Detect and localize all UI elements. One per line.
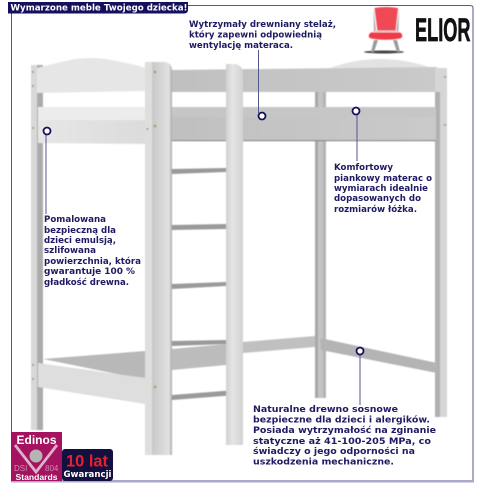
text: wood: Posiada wytrzymałość na zginanie bbox=[253, 425, 436, 435]
badge: 10 year warranty bbox=[62, 449, 113, 481]
text: paint bbox=[44, 214, 141, 287]
lower rear rails bbox=[172, 336, 437, 373]
ladder post bbox=[226, 64, 243, 445]
icon: red chair logo bbox=[364, 7, 404, 54]
text: mattress: piankowy materac o bbox=[334, 173, 432, 183]
bottom frame band bbox=[11, 480, 474, 482]
text: wood: statyczne aż 41-100-205 MPa, co bbox=[253, 436, 431, 446]
text: paint: dzieci emulsją, bbox=[44, 235, 116, 245]
badge: 10 year warranty: Gwarancji bbox=[64, 470, 112, 480]
callout marker: wood bbox=[356, 348, 364, 405]
lower front rail bbox=[38, 363, 145, 404]
back headboard arc bbox=[330, 59, 432, 68]
badge: Edinos standards: DSI bbox=[14, 464, 27, 473]
rear right post bbox=[435, 68, 447, 417]
text: wood: uszkodzenia mechaniczne. bbox=[253, 456, 394, 466]
badge: Edinos standards bbox=[11, 432, 62, 482]
text: paint: szlifowana bbox=[44, 245, 96, 255]
text: frame bbox=[189, 19, 336, 50]
badge: Edinos standards: Edinos bbox=[16, 435, 56, 447]
text: frame: wentylację materaca. bbox=[189, 40, 293, 50]
lower mattress edge bbox=[43, 351, 145, 378]
text: paint: powierzchnia, która bbox=[44, 256, 141, 266]
text: paint: gładkość drewna. bbox=[44, 277, 129, 287]
text: frame: Wytrzymały drewniany stelaż, bbox=[189, 19, 336, 29]
loft bed illustration bbox=[31, 58, 447, 455]
callout marker: paint bbox=[44, 128, 50, 214]
badge: Edinos standards: 804 bbox=[45, 464, 59, 473]
back top rail bbox=[172, 67, 437, 92]
text: mattress: dopasowanych do bbox=[334, 193, 421, 203]
header banner: Wymarzone meble Twojego dziecka! bbox=[10, 3, 188, 13]
text: paint: Pomalowana bbox=[44, 214, 106, 224]
main corner post bbox=[145, 62, 172, 455]
text: wood: bezpieczne dla dzieci i alergików. bbox=[253, 414, 430, 424]
callout marker: mattress bbox=[352, 108, 360, 161]
left front post bbox=[31, 65, 43, 430]
callout marker: frame bbox=[258, 50, 266, 120]
text: mattress: Komfortowy bbox=[334, 162, 394, 172]
badge: Edinos standards: Standards bbox=[16, 473, 58, 482]
text: mattress: rozmiarów łóżka. bbox=[334, 204, 417, 214]
text: wood bbox=[253, 404, 436, 466]
badge: 10 year warranty: 10 lat bbox=[66, 452, 108, 470]
text: paint: bezpieczną dla bbox=[44, 225, 116, 235]
front lower panel bbox=[38, 107, 146, 144]
text: wood: Naturalne drewno sosnowe bbox=[253, 404, 398, 414]
front headboard bbox=[37, 58, 146, 93]
text: mattress: wymiarach idealnie bbox=[334, 183, 428, 193]
text: mattress bbox=[334, 162, 432, 214]
ladder rungs bbox=[172, 168, 236, 400]
text: frame: który zapewni odpowiednią bbox=[189, 30, 322, 40]
screws bbox=[32, 71, 446, 388]
text: wood: świadczy o jego odporności na bbox=[253, 446, 415, 456]
long side rail with mattress bbox=[172, 107, 436, 141]
rear centre post bbox=[315, 92, 326, 398]
text: paint: gwarantuje 100 % bbox=[44, 266, 136, 276]
